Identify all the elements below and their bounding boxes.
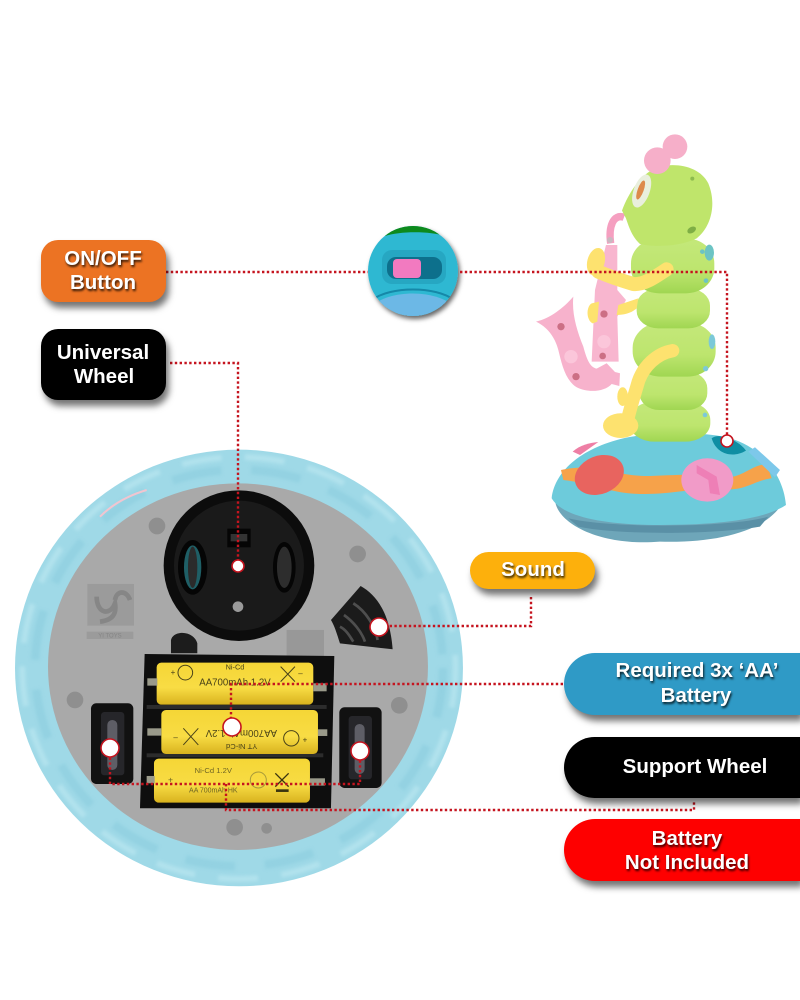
logo [87,584,134,639]
label: Universal Wheel: Universal [57,341,149,364]
label: Battery Not Included: Battery [652,827,722,850]
battery 2: YT Ni-Cd [226,742,257,751]
base of toy [552,433,786,542]
logo: YI TOYS [98,633,122,639]
battery 1: Ni-Cd [226,662,244,671]
battery 1 [147,662,327,705]
battery 1: AA700mAh 1.2V [199,677,271,688]
caterpillar toy with saxophone [536,134,786,542]
battery 2: + [303,736,308,745]
battery 1: + [171,668,176,677]
battery 2 [147,710,327,754]
marker dots [101,435,733,760]
dotted leader lines [110,272,727,810]
label: ON/OFF Button: ON/OFF [64,247,142,270]
battery compartment [140,654,334,808]
battery clip [171,633,197,653]
label: Sound [470,552,595,589]
on/off switch close-up [368,226,458,320]
battery 3: + [168,775,173,785]
grey base plate [48,483,428,850]
label: Battery Not Included: Not Included [625,851,749,874]
label: Required 3x AA Battery: Required 3x ‘AA’ [616,659,778,682]
head [622,134,712,246]
clear blue ring [15,450,463,886]
label: Sound: Sound [501,558,565,581]
label: ON/OFF Button: Button [70,271,136,294]
left support wheel [91,703,133,784]
battery 2: – [173,733,178,742]
battery 1: – [298,669,303,678]
label: Required 3x AA Battery [564,653,800,715]
battery 2: AA700mAh 1.2V [205,727,277,738]
label: Universal Wheel: Wheel [74,365,134,388]
label: Battery Not Included [564,819,800,881]
label: Support Wheel [564,737,800,798]
universal wheel housing [164,490,314,641]
saxophone [536,217,626,391]
underside of toy [15,450,463,886]
battery 3 [147,759,325,803]
battery 3: Ni-Cd 1.2V [195,766,233,775]
label: Required 3x AA Battery: Battery [661,684,731,707]
body segments [629,238,716,442]
right support wheel [339,707,382,788]
battery 3: AA 700mAh HK [189,788,238,795]
speaker grille [331,586,393,649]
yellow arms and leg [584,246,673,438]
label: Universal Wheel [41,329,166,400]
label: Support Wheel: Support Wheel [623,755,767,778]
label: ON/OFF Button [41,240,166,302]
